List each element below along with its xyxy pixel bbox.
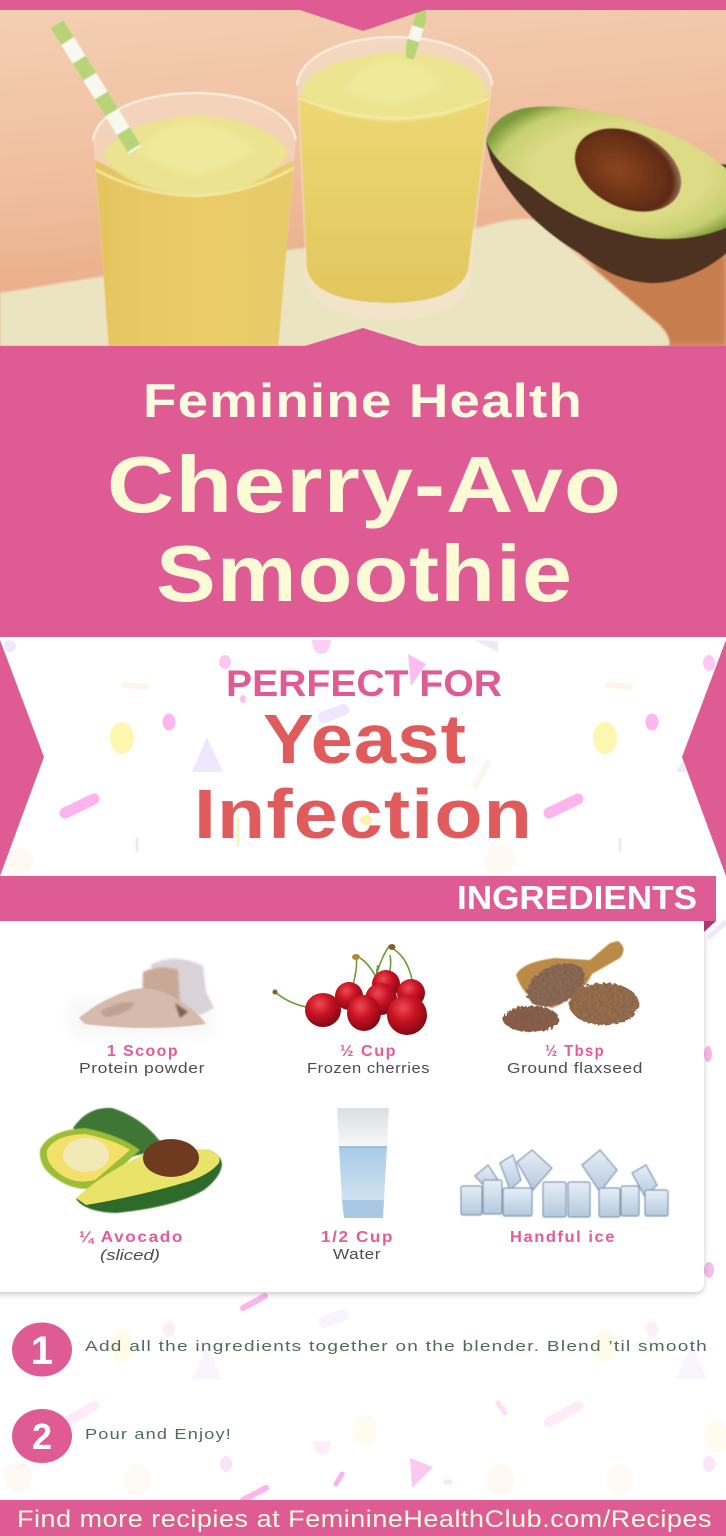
ingredient: ice cubes: [461, 1150, 668, 1246]
cutting board: [0, 219, 670, 346]
left ribbon notch: [0, 640, 44, 876]
footer bar: [0, 1500, 726, 1536]
heading: perfect for: PERFECT FOR: [226, 663, 502, 704]
text: protein powder: Protein powder: [79, 1060, 205, 1077]
text: handful ice: Handful ice: [510, 1229, 616, 1246]
text: ground flaxseed: Ground flaxseed: [507, 1060, 643, 1077]
ingredients header bar: [0, 876, 716, 932]
step 1 badge: [12, 1322, 72, 1376]
heading: yeast: Yeast: [263, 700, 467, 778]
text: 1 scoop: 1 Scoop: [107, 1043, 179, 1060]
faint confetti in steps section: [4, 922, 726, 1500]
avocado half: [486, 106, 726, 283]
left glass: [93, 93, 296, 350]
ingredients card: [0, 921, 704, 1292]
title panel: [0, 328, 726, 637]
text: water: Water: [333, 1246, 381, 1263]
right ribbon notch: [682, 640, 726, 876]
heading: infection: Infection: [194, 775, 533, 853]
top pink band with notch: [0, 0, 726, 31]
title line: Cherry-Avo: Cherry-Avo: [107, 440, 622, 529]
ingredient: avocado: [40, 1108, 222, 1264]
ingredient: frozen cherries: [272, 944, 430, 1077]
step 1 number: 1: [31, 1329, 53, 1373]
right glass: [297, 37, 492, 320]
text: half cup: ½ Cup: [340, 1043, 397, 1060]
text: half cup water: 1/2 Cup: [321, 1229, 394, 1246]
subtitle: Feminine Health: Feminine Health: [143, 374, 583, 427]
step 2: [12, 1409, 232, 1463]
ingredient: ground flaxseed: [503, 941, 643, 1077]
step 2 badge: [12, 1409, 72, 1463]
confetti in banner: [3, 640, 715, 877]
confetti overlapping heading: [238, 815, 372, 846]
step 1: [12, 1322, 708, 1376]
text: quarter avocado: ¼ Avocado: [79, 1229, 184, 1246]
footer text: Find more recipies at FeminineHealthClub.com/Recipes: [17, 1506, 712, 1533]
ingredient: glass of water: [321, 1108, 394, 1263]
step 1 text: Add all the ingredients together on the blender. Blend ’til smooth: [85, 1338, 708, 1355]
text: half tbsp: ½ Tbsp: [545, 1043, 605, 1060]
ingredient: protein powder: [72, 959, 214, 1077]
title line: Smoothie: Smoothie: [156, 529, 573, 618]
text: ingredients: INGREDIENTS: [457, 879, 697, 916]
text: sliced: (sliced): [100, 1247, 160, 1264]
banner: perfect for yeast infection: [0, 637, 726, 877]
step 2 number: 2: [32, 1416, 52, 1457]
left straw: [57, 24, 135, 150]
right straw: [408, 8, 424, 58]
hero photo: smoothies and avocado: [0, 8, 726, 350]
text: frozen cherries: Frozen cherries: [307, 1060, 430, 1077]
step 2 text: Pour and Enjoy!: [85, 1426, 232, 1443]
